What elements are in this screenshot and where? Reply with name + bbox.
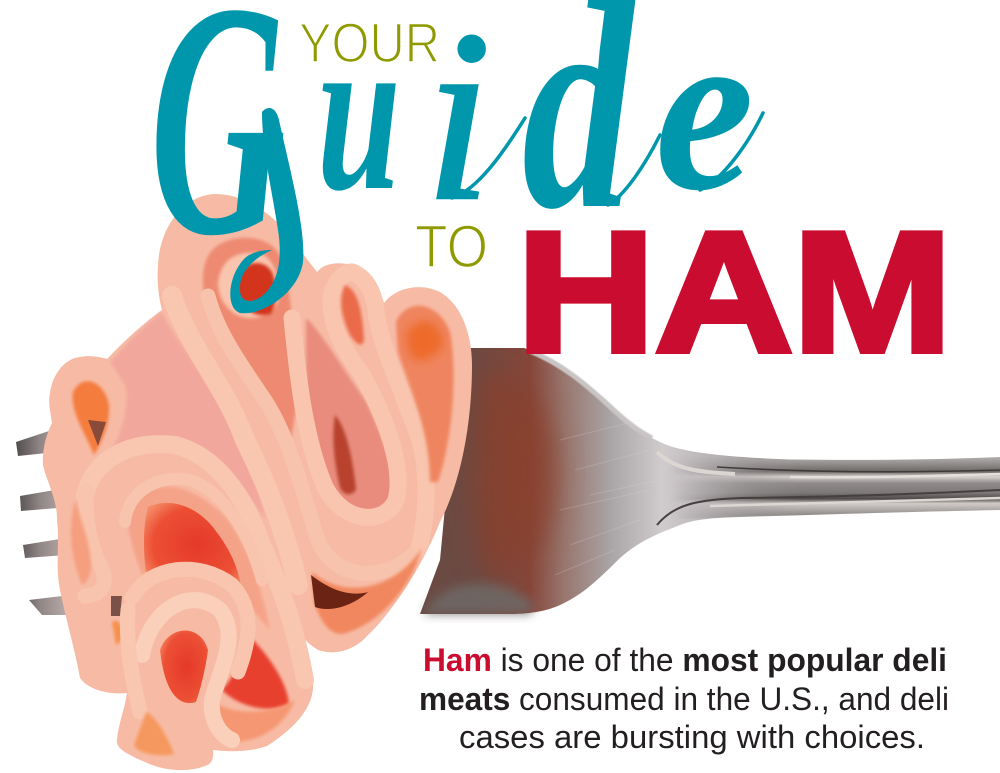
lower hollow (127, 486, 270, 630)
fork brushed lines (555, 420, 660, 575)
fork tines (16, 429, 70, 615)
title: HAM: HAM (517, 197, 952, 388)
bottom right orange and gap (312, 548, 422, 634)
lower left piece (111, 596, 122, 616)
pink sheet (100, 312, 265, 520)
right fold interior (396, 306, 454, 482)
ham silhouette (43, 194, 472, 770)
fork highlights (657, 452, 1000, 525)
line 3: cases are bursting with choices. (459, 719, 925, 755)
fork head (420, 348, 800, 614)
title: YOUR: YOUR (299, 11, 440, 74)
line 1: Ham is one of the most popular deli (423, 642, 947, 678)
left loop interior (73, 381, 109, 455)
inner small loop (160, 630, 208, 703)
center fold interior (306, 318, 398, 519)
left lower band (85, 490, 104, 596)
middle rim band (85, 444, 305, 680)
swash: G tail flourish (230, 108, 303, 313)
top loop interior (203, 238, 300, 445)
fold strips (172, 296, 298, 585)
dark gap (311, 575, 368, 609)
title: Guide (150, 0, 754, 305)
swash: letter connectors (452, 113, 763, 205)
fork (16, 348, 1000, 615)
bottom orange (134, 712, 174, 755)
fork reflection (472, 370, 556, 575)
intro text (419, 642, 949, 755)
fork top edge highlight (530, 351, 652, 438)
center fold rim (292, 272, 426, 545)
title: TO: TO (415, 213, 488, 280)
lower right red (222, 630, 289, 709)
ham slice (43, 194, 472, 770)
fork handle (678, 457, 1000, 518)
lower folds (132, 569, 248, 672)
line 2: meats consumed in the U.S., and deli (419, 681, 949, 717)
